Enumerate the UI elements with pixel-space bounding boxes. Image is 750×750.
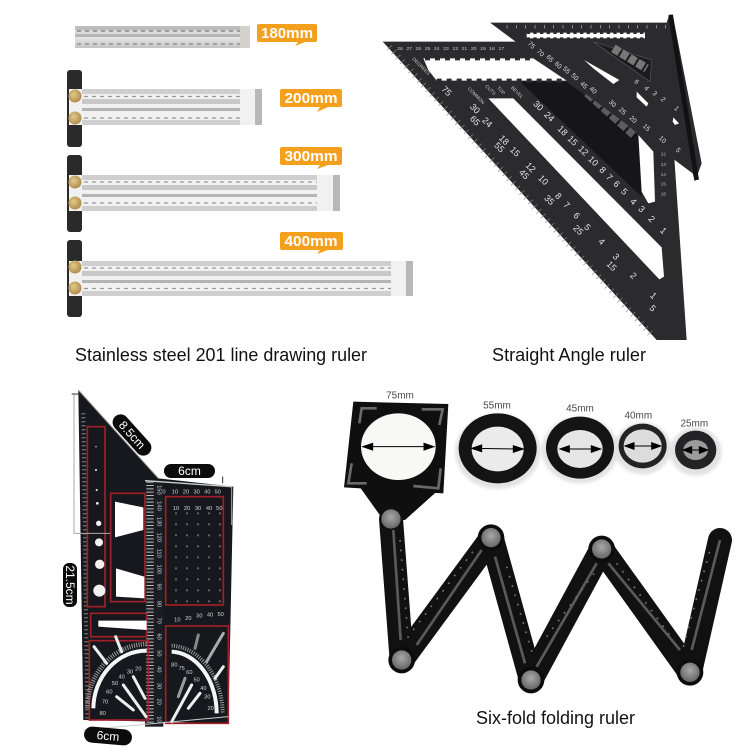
large triangle square: 45 xyxy=(517,167,531,181)
large triangle square: 15 xyxy=(566,134,580,148)
large triangle square: 1 xyxy=(648,290,659,301)
large triangle square: 10 xyxy=(586,154,600,168)
large triangle square: 1 xyxy=(658,225,669,236)
small triangle square: 6 xyxy=(632,78,640,86)
large triangle square: 24 xyxy=(542,110,556,124)
large triangle square: 19 xyxy=(480,46,486,52)
small triangle square: 15 xyxy=(641,123,651,133)
tool scale numbers: 30 xyxy=(155,683,161,689)
large triangle square: 16 xyxy=(661,191,666,196)
tool scale numbers: 40 xyxy=(200,686,206,692)
large triangle square: 12 xyxy=(576,144,590,158)
label: 180mm: 180mm xyxy=(261,26,313,42)
size labels: 40mm xyxy=(624,410,652,421)
tool body xyxy=(72,390,233,730)
tool scale numbers: 80 xyxy=(100,711,106,717)
panel: six-fold folding ruler xyxy=(344,390,722,693)
panel: 45 degree square tool xyxy=(72,390,233,730)
large triangle square: 21 xyxy=(462,46,467,52)
tool scale numbers: 30 xyxy=(127,669,133,675)
tool scale numbers: 40 xyxy=(155,666,161,672)
tool scale numbers: 100 xyxy=(155,565,161,574)
label: 300mm: 300mm xyxy=(284,149,338,165)
small triangle square: 5 xyxy=(674,147,682,155)
small triangle square: 50 xyxy=(569,72,580,83)
small triangle square: 20 xyxy=(628,115,638,125)
caption: stainless steel ruler: Stainless steel 201 line drawing ruler xyxy=(75,345,367,365)
large triangle square: 10 xyxy=(536,173,550,187)
pill: 8.5cm xyxy=(109,411,155,459)
large triangle square: 15 xyxy=(508,145,522,159)
large triangle square: 17 xyxy=(499,46,504,52)
large triangle square: 7 xyxy=(604,172,615,183)
tool scale numbers: 40 xyxy=(119,674,125,680)
tool scale numbers: 40 xyxy=(204,489,210,495)
large triangle square: 24 xyxy=(480,115,494,129)
pill: 21.5cm: 21.5cm xyxy=(63,565,77,605)
large triangle square: 12 xyxy=(661,151,666,156)
large triangle square: 2 xyxy=(646,214,657,224)
large triangle square xyxy=(383,42,687,340)
label: 400mm: 400mm xyxy=(284,234,338,250)
large triangle square: 8 xyxy=(553,191,564,201)
tool scale numbers: 10 xyxy=(173,506,179,512)
pill: 8.5cm: 8.5cm xyxy=(116,418,148,452)
diameter arrows xyxy=(363,443,708,453)
tool scale numbers: 10 xyxy=(155,716,161,722)
pill: 6cm bottom xyxy=(83,726,133,746)
large triangle square: 4 xyxy=(596,236,607,247)
tool scale numbers: 140 xyxy=(155,501,161,511)
small triangle square: 45 xyxy=(578,80,589,91)
400mm ruler xyxy=(67,240,413,317)
tool scale numbers: 20 xyxy=(135,667,141,673)
200mm ruler xyxy=(67,70,262,147)
large triangle square: 18 xyxy=(489,46,495,52)
tool scale numbers: 40 xyxy=(207,613,213,619)
large triangle square: 25 xyxy=(571,223,585,237)
pill: 6cm top: 6cm xyxy=(178,464,201,478)
tool scale numbers: 80 xyxy=(171,663,177,669)
size labels: 45mm xyxy=(566,404,594,415)
large triangle square: 20 xyxy=(471,46,477,52)
large triangle square: 23 xyxy=(443,46,449,52)
tool scale numbers: 20 xyxy=(208,706,214,712)
small triangle square: 2 xyxy=(659,96,667,104)
small triangle square: 3 xyxy=(651,90,658,98)
tool scale numbers: 20 xyxy=(185,616,191,622)
tool scale numbers: 0 xyxy=(162,489,166,495)
large triangle square: DEGREES xyxy=(411,56,431,76)
large triangle square: 65 xyxy=(468,114,482,128)
small triangle square: 4 xyxy=(642,85,650,93)
large triangle square: 3 xyxy=(636,204,647,214)
tool scale numbers: 130 xyxy=(155,517,161,526)
tool scale numbers: 30 xyxy=(194,489,200,495)
large triangle square: 55 xyxy=(492,140,506,154)
large triangle square: 6 xyxy=(611,179,622,189)
tool scale numbers: 50 xyxy=(155,650,161,656)
large triangle square: 6 xyxy=(571,210,582,221)
label: 200mm xyxy=(280,89,342,112)
300mm ruler xyxy=(67,155,340,232)
180mm ruler xyxy=(75,26,250,48)
tool scale numbers: 10 xyxy=(174,618,180,624)
tool scale numbers: 20 xyxy=(183,489,189,495)
tool scale numbers: 75 xyxy=(179,666,185,672)
large triangle square: 15 xyxy=(661,181,666,186)
large triangle square: 24 xyxy=(434,46,440,52)
small triangle square: 1 xyxy=(672,105,680,113)
large triangle square: 14 xyxy=(661,172,666,177)
folding arms xyxy=(391,519,720,680)
large triangle square: 35 xyxy=(542,193,556,207)
large triangle square: 13 xyxy=(661,162,666,167)
tool scale numbers: 30 xyxy=(195,506,201,512)
large triangle square: 75 xyxy=(440,84,454,98)
protractors xyxy=(87,633,223,722)
small triangle square: 40 xyxy=(588,85,598,96)
small triangle square: 55 xyxy=(561,65,571,76)
square head with round hole xyxy=(344,402,448,520)
label: 200mm: 200mm xyxy=(284,91,338,107)
tool scale numbers: 70 xyxy=(155,618,161,624)
small triangle square: 30 xyxy=(607,99,617,109)
pill: 6cm bottom: 6cm xyxy=(96,728,120,744)
tool scale numbers: 60 xyxy=(106,689,112,695)
large triangle square: 28 xyxy=(397,46,403,52)
tool scale numbers: 80 xyxy=(155,601,161,607)
tool scale numbers: 20 xyxy=(155,699,161,705)
caption: straight angle ruler: Straight Angle ruler xyxy=(492,345,646,365)
soft background shadow xyxy=(455,414,722,489)
pill: 6cm top xyxy=(164,464,215,478)
small triangle square: 10 xyxy=(657,135,667,145)
small triangle square: 25 xyxy=(617,106,627,117)
large triangle square: 30 xyxy=(468,102,482,116)
label: 400mm xyxy=(280,232,343,254)
size labels: 75mm xyxy=(386,390,414,401)
panel: straight angle rulers xyxy=(383,15,702,340)
label: 180mm xyxy=(257,24,317,46)
large triangle square: 22 xyxy=(453,46,458,52)
large triangle square: 7 xyxy=(561,200,572,210)
tool scale numbers: 10 xyxy=(172,489,178,495)
large triangle square: TOP xyxy=(496,85,506,96)
large triangle square: 4 xyxy=(628,196,639,207)
small triangle square: 70 xyxy=(535,48,545,59)
caption: six-fold folding ruler: Six-fold folding ruler xyxy=(476,708,635,728)
tool scale numbers: 40 xyxy=(206,506,212,512)
tool scale numbers: 50 xyxy=(218,612,224,618)
tool scale numbers: 150 xyxy=(155,485,161,495)
small triangle square: 75 xyxy=(526,40,536,51)
large triangle square: 27 xyxy=(407,46,412,52)
large triangle square: 15 xyxy=(605,259,619,273)
large triangle square: 2 xyxy=(628,270,639,281)
dimension lines xyxy=(72,394,232,730)
tool scale numbers xyxy=(100,485,224,722)
large triangle square: 8 xyxy=(597,165,608,175)
tool scale numbers: 120 xyxy=(155,533,161,542)
size labels: 55mm xyxy=(483,400,511,411)
large triangle square: 26 xyxy=(416,46,421,52)
size labels: 25mm xyxy=(680,419,708,430)
large triangle square: 5 xyxy=(647,303,658,314)
large triangle square: COMMON xyxy=(467,86,486,105)
large triangle square: 3 xyxy=(611,251,621,262)
tool scale numbers: 50 xyxy=(216,506,222,512)
tool scale numbers: 70 xyxy=(102,699,108,705)
size labels xyxy=(386,390,708,430)
large triangle square: 18 xyxy=(556,124,570,138)
aperture rings xyxy=(459,413,716,483)
large triangle square: BEVEL xyxy=(510,85,524,100)
tool scale numbers: 90 xyxy=(155,584,161,590)
label: 300mm xyxy=(280,147,342,169)
large triangle square: 5 xyxy=(619,186,630,197)
tool scale numbers: 20 xyxy=(184,506,190,512)
tool scale numbers: 50 xyxy=(194,678,200,684)
tool scale numbers: 30 xyxy=(196,613,202,619)
pivot discs xyxy=(381,509,703,693)
tool scale numbers: 50 xyxy=(112,681,118,687)
large triangle square: 30 xyxy=(531,99,545,113)
tool scale numbers: 60 xyxy=(155,634,161,640)
panel: stainless steel line drawing rulers xyxy=(67,24,413,317)
large triangle square: 25 xyxy=(425,46,431,52)
large triangle square: CUTS xyxy=(484,84,497,96)
tool scale numbers: 60 xyxy=(186,670,192,676)
large triangle square: 12 xyxy=(524,160,538,174)
tool scale numbers: 110 xyxy=(155,549,161,558)
large triangle square: 18 xyxy=(497,133,511,147)
small triangle square: 65 xyxy=(544,54,555,64)
tool scale numbers: 50 xyxy=(215,489,221,495)
small triangle square: 60 xyxy=(553,60,563,71)
small triangle square xyxy=(490,15,702,182)
large triangle square: 5 xyxy=(582,222,593,233)
tool scale numbers: 30 xyxy=(204,694,210,700)
